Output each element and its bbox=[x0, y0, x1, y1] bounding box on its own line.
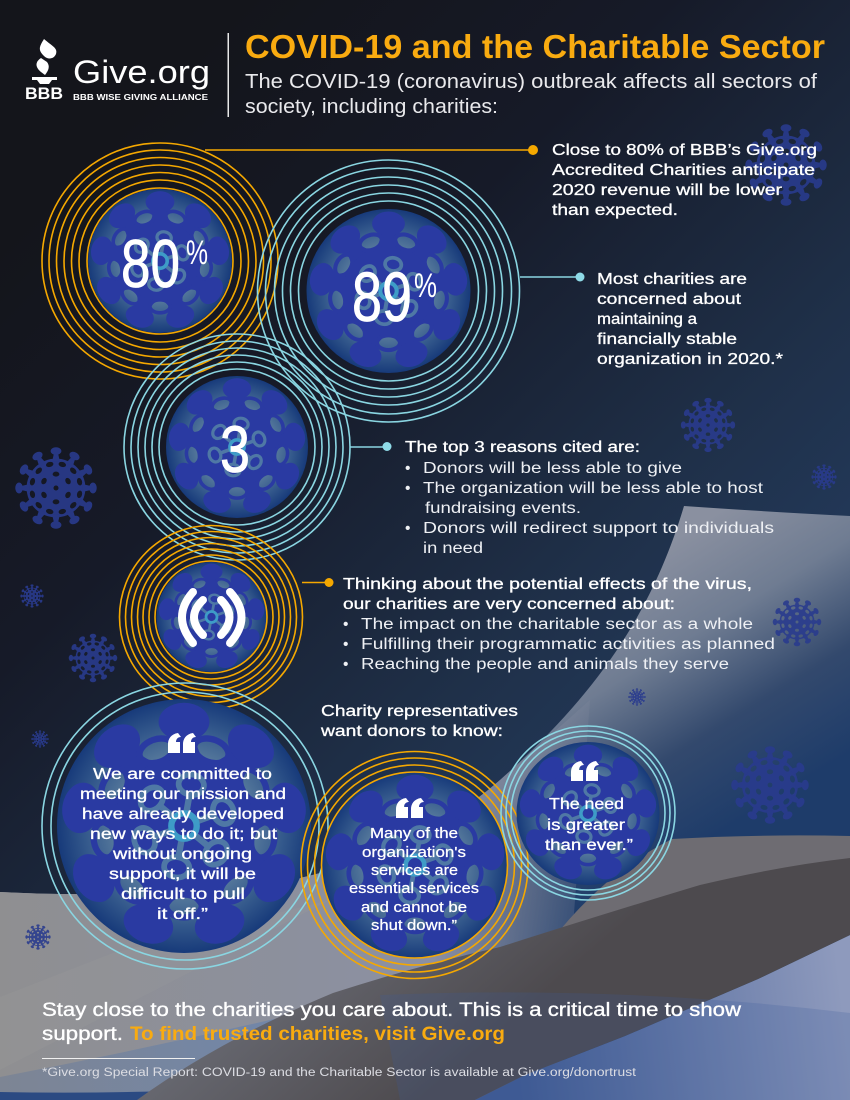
quote circle: large bbox=[42, 683, 328, 969]
quote text bbox=[545, 796, 633, 854]
icon: quote mark bbox=[396, 798, 424, 818]
quote text bbox=[349, 826, 479, 934]
title: COVID-19 and the Charitable Sector bbox=[245, 28, 825, 65]
text: top 3 reasons list: The organization will be less able to host bbox=[423, 480, 764, 497]
heading: charity representatives: Charity representatives bbox=[321, 703, 518, 720]
stat circle: 80%: 80 bbox=[121, 226, 180, 302]
text: top 3 reasons list: in need bbox=[423, 540, 483, 557]
text: top 3 reasons list bbox=[405, 439, 774, 557]
quote text: organization's bbox=[362, 845, 466, 861]
connector: top 3 bbox=[350, 442, 392, 451]
stat circle: 89%: 89 bbox=[352, 258, 412, 336]
connector: 80 percent bbox=[205, 145, 538, 155]
logo wordmark BBB: BBB bbox=[25, 84, 63, 103]
quote text: is greater bbox=[547, 817, 625, 834]
stat circle: 3 bbox=[124, 334, 350, 560]
call to action: Stay close to the charities you care about. This is a critical time to show bbox=[42, 1000, 741, 1021]
quote text: Many of the bbox=[370, 826, 458, 842]
subtitle: The COVID-19 (coronavirus) outbreak affects all sectors of bbox=[245, 71, 817, 93]
text: 89 percent statement: organization in 2020.* bbox=[597, 351, 783, 368]
icon: quote mark bbox=[571, 761, 599, 781]
quote text: essential services bbox=[349, 881, 479, 897]
text: 80 percent statement: Close to 80% of BBB’s Give.org bbox=[552, 142, 817, 159]
stat circle: 3: 3 bbox=[220, 412, 250, 486]
text: 80 percent statement: than expected. bbox=[552, 202, 678, 219]
quote circle: medium bbox=[301, 752, 528, 978]
call to action: To find trusted charities, visit Give.org bbox=[130, 1024, 505, 1045]
stat circle: 89% bbox=[258, 160, 520, 422]
connector: 89 percent bbox=[520, 272, 584, 282]
quote text: difficult to pull bbox=[121, 886, 245, 903]
text: potential effects list: • bbox=[343, 656, 348, 673]
quote text: meeting our mission and bbox=[80, 786, 286, 803]
subtitle: society, including charities: bbox=[245, 96, 498, 118]
quote text: than ever.” bbox=[545, 837, 633, 854]
text: 89 percent statement bbox=[597, 271, 783, 368]
text: potential effects list: The impact on the charitable sector as a whole bbox=[361, 616, 753, 633]
quote text: services are bbox=[371, 863, 458, 879]
text: 89 percent statement: concerned about bbox=[597, 291, 742, 308]
text: potential effects list: Thinking about the potential effects of the virus, bbox=[343, 576, 752, 593]
logo: BBB Give.org bbox=[25, 39, 210, 103]
text: top 3 reasons list: fundraising events. bbox=[425, 500, 581, 517]
connector: potential effects bbox=[302, 578, 334, 587]
stat circle: 89%: % bbox=[414, 267, 437, 305]
logo wordmark Give.org: Give.org bbox=[73, 54, 210, 90]
text: potential effects list: Fulfilling their programmatic activities as planned bbox=[361, 636, 775, 653]
decorative virus icons bbox=[15, 124, 837, 950]
text: potential effects list bbox=[343, 576, 775, 673]
quote text: new ways to do it; but bbox=[90, 826, 278, 843]
icon: radio waves bbox=[182, 592, 242, 643]
quote text: it off.” bbox=[157, 906, 208, 923]
footnote: *Give.org Special Report: COVID-19 and the Charitable Sector is available at Give.org/donortrust bbox=[42, 1067, 637, 1079]
heading: charity representatives: want donors to know: bbox=[320, 723, 503, 740]
text: potential effects list: Reaching the people and animals they serve bbox=[361, 656, 729, 673]
stat circle: 80%: % bbox=[186, 234, 208, 272]
text: top 3 reasons list: The top 3 reasons cited are: bbox=[405, 439, 640, 456]
quote text bbox=[80, 766, 286, 923]
quote text: We are committed to bbox=[93, 766, 272, 783]
text: potential effects list: • bbox=[343, 636, 348, 653]
text: top 3 reasons list: • bbox=[405, 520, 410, 537]
text: 80 percent statement bbox=[552, 142, 817, 219]
quote text: shut down.” bbox=[371, 918, 457, 934]
stat circle: broadcast icon bbox=[120, 526, 302, 708]
icon: quote mark bbox=[168, 733, 196, 753]
text: top 3 reasons list: Donors will redirect support to individuals bbox=[423, 520, 774, 537]
quote text: support, it will be bbox=[109, 866, 256, 883]
quote text: The need bbox=[549, 796, 624, 813]
text: 89 percent statement: financially stable bbox=[597, 331, 737, 348]
text: top 3 reasons list: • bbox=[405, 480, 410, 497]
text: potential effects list: • bbox=[343, 616, 348, 633]
quote text: and cannot be bbox=[361, 900, 467, 916]
stat circle: 80% bbox=[42, 143, 278, 379]
subtitle bbox=[245, 71, 817, 118]
quote text: without ongoing bbox=[112, 846, 252, 863]
text: 89 percent statement: Most charities are bbox=[597, 271, 747, 288]
text: top 3 reasons list: Donors will be less able to give bbox=[423, 460, 682, 477]
text: potential effects list: our charities are very concerned about: bbox=[343, 596, 675, 613]
quote text: have already developed bbox=[82, 806, 284, 823]
heading: charity representatives bbox=[320, 703, 518, 740]
text: 80 percent statement: Accredited Charities anticipate bbox=[552, 162, 815, 179]
text: top 3 reasons list: • bbox=[405, 460, 410, 477]
text: 89 percent statement: maintaining a bbox=[597, 311, 697, 328]
call to action bbox=[42, 1000, 741, 1045]
icon: BBB torch bbox=[32, 39, 57, 84]
logo tagline: BBB WISE GIVING ALLIANCE bbox=[73, 93, 209, 102]
call to action: support. bbox=[42, 1024, 123, 1045]
quote circle: small bbox=[501, 726, 675, 900]
text: 80 percent statement: 2020 revenue will be lower bbox=[552, 182, 782, 199]
